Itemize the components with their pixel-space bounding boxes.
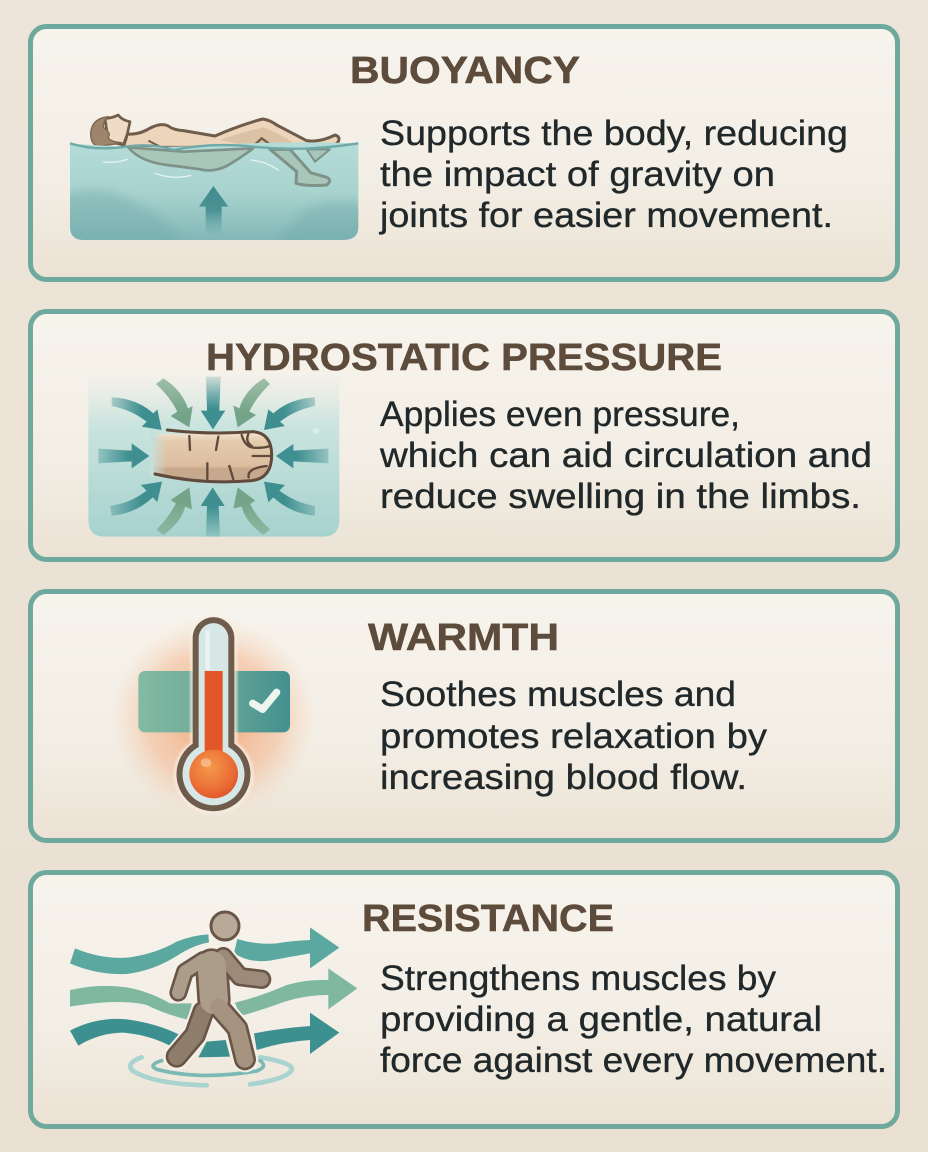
icon: person floating in water — [63, 115, 365, 247]
pressure arrow: lower inner left — [157, 487, 192, 535]
body text: warmth: Soothes muscles and — [380, 674, 736, 714]
body text: buoyancy: Supports the body, reducing — [380, 113, 848, 153]
panel: buoyancy — [30, 26, 898, 280]
pressure arrow: lower right — [264, 482, 315, 516]
pressure arrow: left — [98, 443, 149, 468]
heading: buoyancy: BUOYANCY — [350, 50, 580, 92]
pressure arrow: top — [201, 377, 225, 429]
panel frame: warmth — [30, 592, 898, 840]
panel: resistance — [30, 872, 898, 1126]
body text: warmth — [380, 674, 767, 797]
panel frame: hydrostatic pressure — [30, 312, 898, 560]
body text: hydrostatic pressure — [379, 394, 872, 516]
pressure arrow: upper right — [264, 397, 315, 430]
heading: warmth: WARMTH — [368, 617, 559, 659]
body text: buoyancy: joints for easier movement. — [379, 195, 833, 235]
panel: hydrostatic pressure — [30, 312, 898, 560]
heading: resistance: RESISTANCE — [362, 898, 614, 940]
icon: finger under pressure arrows — [88, 375, 339, 537]
panel: warmth — [30, 592, 898, 840]
body text: resistance: force against every movement. — [380, 1040, 887, 1080]
icon: thermometer with check band — [110, 614, 317, 817]
body text: resistance — [380, 958, 887, 1080]
body text: warmth: promotes relaxation by — [380, 716, 767, 756]
body text: resistance: providing a gentle, natural — [380, 999, 822, 1039]
body text: warmth: increasing blood flow. — [380, 757, 747, 797]
pressure arrow: lower inner right — [233, 487, 270, 535]
body text: hydrostatic pressure: reduce swelling in the limbs. — [380, 476, 861, 516]
body text: hydrostatic pressure: Applies even pressure, — [380, 394, 740, 434]
head — [211, 912, 239, 940]
pressure arrow: bottom — [201, 487, 225, 537]
panel frame: buoyancy — [30, 26, 898, 280]
pressure arrow: upper left — [112, 397, 162, 430]
body text: resistance: Strengthens muscles by — [380, 958, 776, 998]
pressure arrow: upper inner right — [233, 378, 270, 427]
current arrows — [70, 927, 357, 1057]
water ripples — [130, 1057, 292, 1085]
body text: hydrostatic pressure: which can aid circulation and — [379, 435, 872, 475]
panel frame: resistance — [30, 872, 898, 1126]
body text: buoyancy: the impact of gravity on — [380, 154, 775, 194]
heading: hydrostatic pressure: HYDROSTATIC PRESSURE — [206, 337, 722, 379]
body text: buoyancy — [379, 113, 848, 235]
pressure arrow: upper inner left — [156, 378, 193, 427]
pressure arrow: lower left — [110, 482, 162, 516]
pressure arrow: right — [276, 444, 328, 468]
walking figure — [177, 957, 262, 1059]
icon: person walking against water currents — [70, 912, 357, 1085]
